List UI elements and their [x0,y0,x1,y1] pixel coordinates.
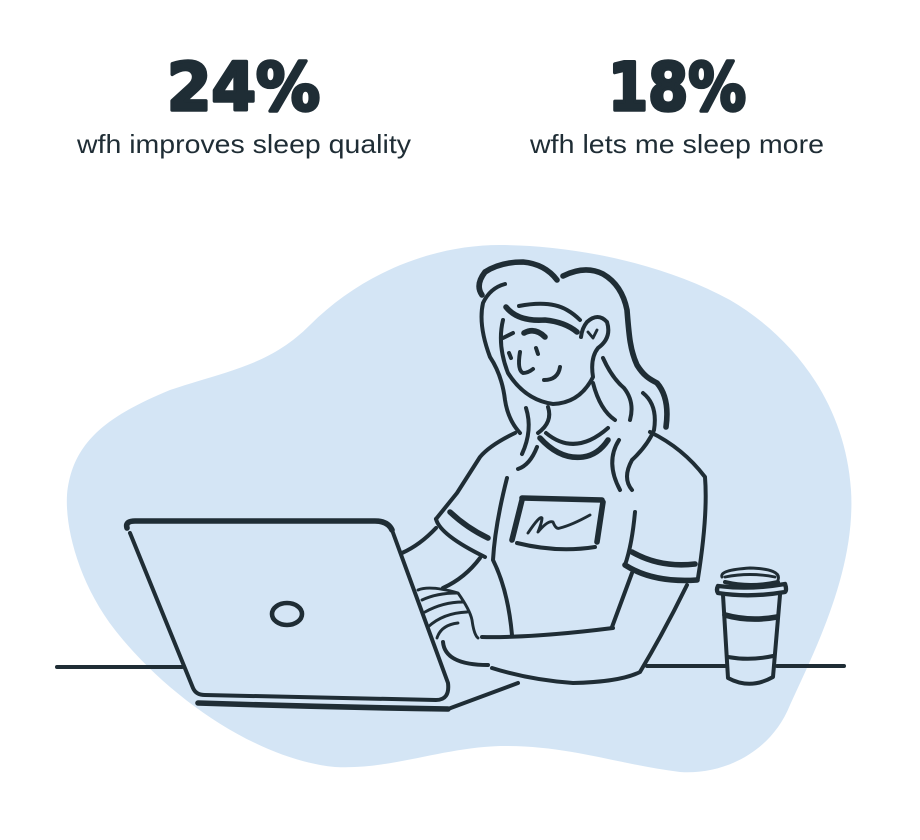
stat: 18% lets me sleep more [529,49,824,159]
background blob [67,245,851,772]
icon: coffee cup [717,568,786,684]
stat number 24%: 24% [167,49,320,126]
illustration: woman [402,262,706,683]
illustration: laptop [127,521,518,709]
stat: 24% improves sleep quality [76,49,411,159]
arm and hand [402,528,687,683]
stat caption right: wfh lets me sleep more [529,129,824,159]
illustration: table line [57,666,844,667]
hair [479,262,667,490]
stat number 18%: 18% [608,49,746,126]
stat caption left: wfh improves sleep quality [76,129,411,159]
face [501,317,608,433]
t-shirt [436,432,706,637]
laptop logo [272,603,302,625]
shirt pocket with scribble [512,498,603,549]
collar [540,428,608,457]
